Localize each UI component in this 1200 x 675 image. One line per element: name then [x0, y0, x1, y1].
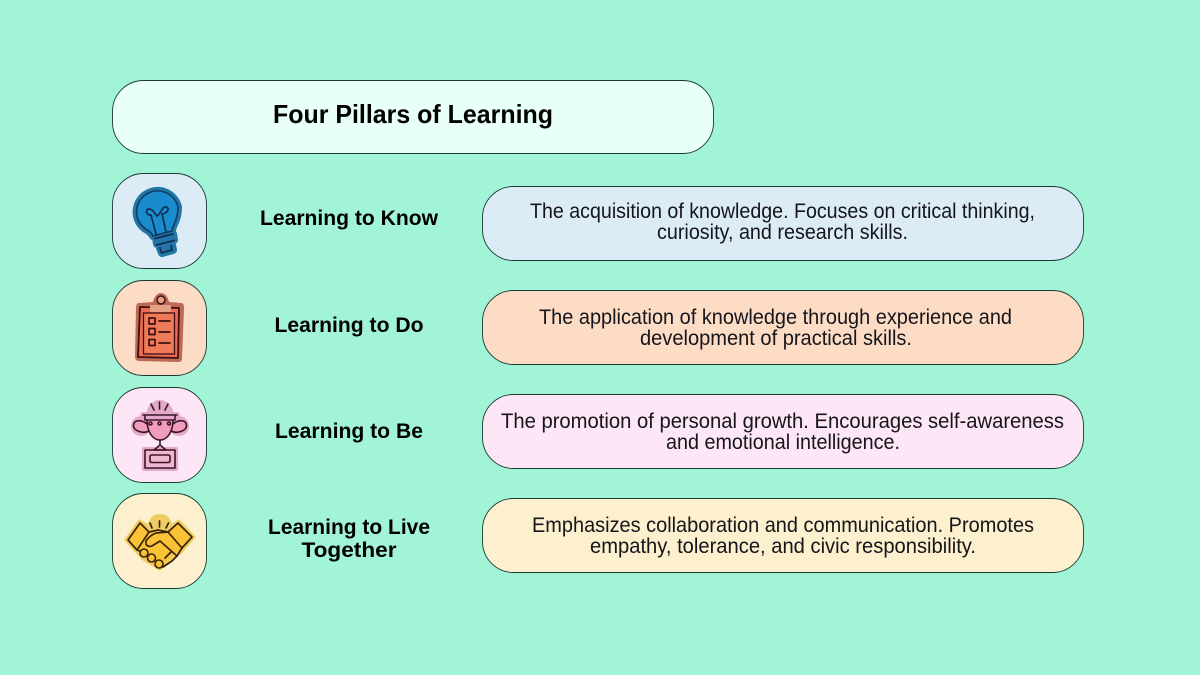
- description pill: [482, 498, 1084, 572]
- icon panel: handshake: [112, 494, 206, 588]
- row: Learning to Live Together: [112, 494, 1084, 588]
- title banner: [112, 80, 714, 154]
- description pill: The application of knowledge through experience and: [539, 306, 1012, 329]
- label: [268, 516, 430, 562]
- icon panel: clipboard: [112, 280, 206, 376]
- description pill: curiosity, and research skills.: [657, 221, 908, 244]
- description pill: and emotional intelligence.: [666, 431, 900, 454]
- label: Together: [302, 539, 396, 562]
- halo: [137, 191, 178, 253]
- label: Learning to Do: [274, 314, 424, 337]
- row: Learning to Know: [112, 174, 1084, 268]
- title: Four Pillars of Learning: [273, 99, 553, 129]
- halo: [131, 400, 189, 471]
- description pill: Emphasizes collaboration and communication. Promotes: [532, 514, 1034, 537]
- description pill: empathy, tolerance, and civic responsibility.: [590, 535, 976, 558]
- halo: [135, 293, 184, 362]
- description pill: [482, 394, 1084, 468]
- row: Learning to Be: [112, 388, 1084, 482]
- label: Learning to Be: [275, 420, 423, 443]
- label: Learning to Live: [268, 516, 430, 539]
- label: Learning to Know: [260, 207, 439, 230]
- icon panel: light bulb: [112, 174, 206, 268]
- halo: [124, 514, 196, 571]
- description pill: development of practical skills.: [640, 327, 912, 350]
- row: Learning to Do: [112, 280, 1084, 376]
- description pill: The acquisition of knowledge. Focuses on critical thinking,: [530, 200, 1035, 223]
- description pill: The promotion of personal growth. Encourages self-awareness: [501, 410, 1064, 433]
- description pill: [482, 186, 1084, 260]
- icon panel: trophy: [112, 388, 206, 482]
- description pill: [482, 290, 1084, 364]
